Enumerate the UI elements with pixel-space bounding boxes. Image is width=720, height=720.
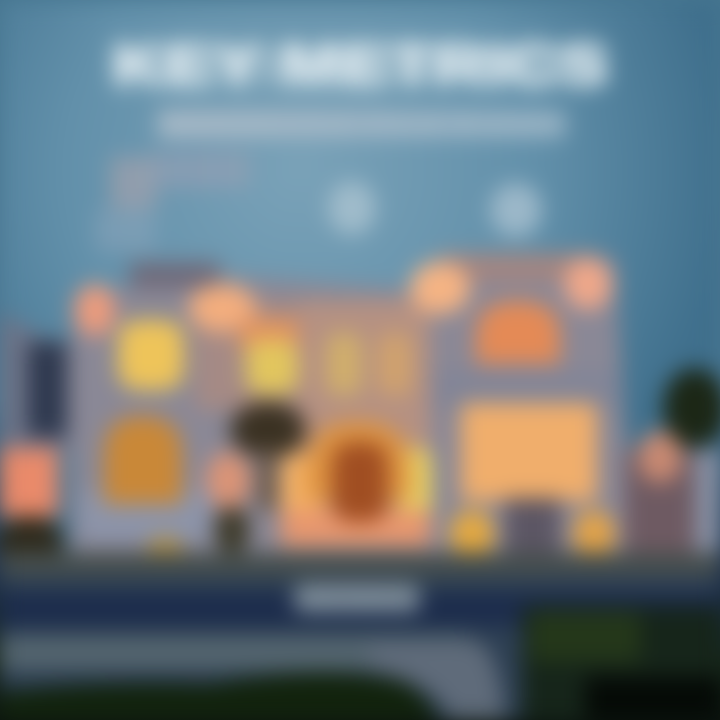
right side house, tree [625,368,720,570]
upper windows [118,301,560,395]
sign text on banner: METRICS [299,586,415,614]
front door [332,442,388,522]
house body [70,254,650,576]
faint chart area [95,152,250,252]
entry lamps and dark doorway [145,498,615,576]
subtitle: Residential Real Estate [160,111,564,138]
lower windows and door [104,403,597,546]
street and ground band [0,552,720,720]
driveway [370,642,505,720]
left orange glow and shrubs [0,448,250,568]
icon: right metric [490,183,542,237]
centre tree [214,402,306,554]
front lawn hedge [0,672,438,720]
neighbouring house on left [0,312,80,450]
subtitle [158,110,566,138]
title: KEY METRICS [112,31,608,100]
icon: left metric [328,181,376,235]
roof glow lights [75,258,612,352]
right hedge [522,606,720,720]
